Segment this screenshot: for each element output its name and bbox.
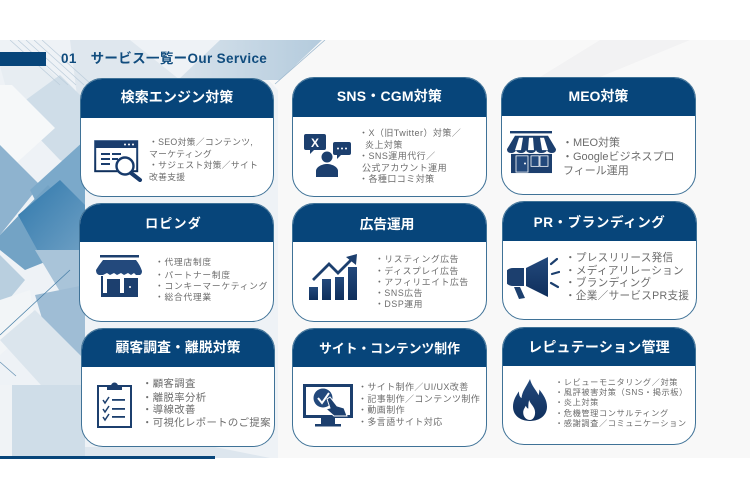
title: 01 サービス一覧ーOur Service bbox=[61, 51, 267, 66]
text: SNS・CGM対策 details: ・各種口コミ対策 bbox=[359, 174, 435, 184]
text: 検索エンジン対策 details bbox=[149, 137, 258, 182]
text: サイト details: ・記事制作／コンテンツ制作 bbox=[358, 394, 480, 404]
heading: レピュテーション管理 bbox=[503, 328, 695, 366]
heading: SNS・CGM対策: SNS・CGM対策 bbox=[337, 88, 442, 104]
panel: MEO対策 bbox=[501, 77, 696, 195]
panel: 広告運用 bbox=[292, 203, 487, 322]
panel: PR・ブランディング bbox=[502, 201, 697, 320]
text: 顧客調査 details: ・導線改善 bbox=[142, 405, 196, 416]
text: 検索エンジン対策 details: ・SEO対策／コンテンツ, bbox=[149, 137, 253, 147]
heading: 検索エンジン対策: 検索エンジン対策 bbox=[121, 89, 233, 105]
text: PR・ブランディング details: ・ブランディング bbox=[565, 277, 651, 289]
text: ロビンダ details: ・コンキーマーケティング bbox=[155, 281, 268, 291]
heading: サイト・コンテンツ制作: サイト・コンテンツ制作 bbox=[319, 341, 460, 356]
text: MEO対策 details: ・Googleビジネスプロ bbox=[562, 151, 674, 163]
text: SNS・CGM対策 details bbox=[359, 128, 461, 184]
text: SNS・CGM対策 details: ・X（旧Twitter）対策／ bbox=[359, 128, 461, 138]
heading: ロピンダ: ロピンダ bbox=[145, 216, 202, 231]
heading: 検索エンジン対策 bbox=[81, 79, 273, 118]
text: PR・ブランディング details: ・メディアリレーション bbox=[565, 265, 684, 277]
heading: MEO対策 bbox=[502, 78, 695, 116]
header accent bar bbox=[0, 52, 46, 66]
heading: PR・ブランディング: PR・ブランディング bbox=[534, 215, 665, 230]
text: 顧客調査 details: ・顧客調査 bbox=[142, 379, 196, 390]
text: 顧客調査 details: ・離脱率分析 bbox=[142, 393, 206, 404]
text: MEO対策 details: フィール運用 bbox=[563, 165, 629, 177]
icon: shop bbox=[96, 255, 142, 297]
text: ロビンダ details: ・パートナー制度 bbox=[155, 270, 231, 280]
text: SNS・CGM対策 details: 炎上対策 bbox=[365, 140, 403, 150]
icon: chat person bbox=[304, 134, 351, 177]
icon: rising chart bbox=[309, 254, 357, 300]
text: 広告運用 details: ・ディスプレイ広告 bbox=[375, 266, 459, 276]
text: ロビンダ details bbox=[155, 257, 268, 302]
text: MEO対策 details bbox=[562, 136, 674, 177]
icon: flame bbox=[513, 379, 547, 421]
icon: clipboard checklist bbox=[97, 382, 132, 428]
panel: サイト・コンテンツ制作 bbox=[292, 328, 487, 447]
heading: レピュテーション管理: レピュテーション管理 bbox=[528, 339, 670, 355]
text: レピュテーション details: ・レビューモニタリング／対策 bbox=[555, 378, 678, 387]
panel: 検索エンジン対策 bbox=[80, 78, 274, 197]
text: 顧客調査 details bbox=[142, 378, 271, 429]
text: レピュテーション details: ・炎上対策 bbox=[555, 398, 599, 407]
heading: サイト・コンテンツ制作 bbox=[293, 329, 486, 367]
heading: 顧客調査・離脱対策: 顧客調査・離脱対策 bbox=[115, 340, 241, 355]
icon: storefront bbox=[507, 131, 556, 174]
icon: browser with magnifier bbox=[94, 140, 142, 182]
text: SNS・CGM対策 details: ・SNS運用代行／ bbox=[359, 151, 436, 161]
text: 広告運用 details: ・DSP運用 bbox=[375, 299, 423, 309]
footer bar bbox=[0, 456, 215, 459]
text: 顧客調査 details: ・可視化レポートのご提案 bbox=[142, 418, 271, 429]
text: レピュテーション details bbox=[555, 378, 688, 428]
heading: SNS・CGM対策 bbox=[293, 78, 486, 117]
panel: レピュテーション管理 bbox=[502, 327, 696, 445]
text: サイト details bbox=[358, 382, 480, 427]
heading: 広告運用: 広告運用 bbox=[360, 217, 414, 232]
text: サイト details: ・多言語サイト対応 bbox=[358, 417, 443, 427]
heading: 広告運用 bbox=[293, 204, 486, 242]
text: 検索エンジン対策 details: マーケティング bbox=[149, 149, 212, 159]
text: 広告運用 details: ・リスティング広告 bbox=[375, 254, 459, 264]
heading: MEO対策: MEO対策 bbox=[569, 88, 628, 104]
text: 広告運用 details: ・アフィリエイト広告 bbox=[375, 277, 469, 287]
text: レピュテーション details: ・風評被害対策（SNS・掲示板） bbox=[555, 388, 688, 397]
text: PR・ブランディング details: ・プレスリリース発信 bbox=[565, 252, 673, 264]
text: ロビンダ details: ・総合代理業 bbox=[155, 292, 212, 302]
heading: PR・ブランディング bbox=[503, 202, 696, 241]
heading: ロピンダ bbox=[80, 204, 273, 242]
text: PR・ブランディング details bbox=[565, 252, 689, 302]
text: SNS・CGM対策 details: 公式アカウント運用 bbox=[362, 163, 447, 173]
text: ロビンダ details: ・代理店制度 bbox=[155, 257, 212, 267]
panel: SNS・CGM対策 bbox=[292, 77, 487, 197]
text: レピュテーション details: ・危機管理コンサルティング bbox=[555, 409, 669, 418]
heading: 顧客調査・離脱対策 bbox=[82, 329, 274, 367]
text: 検索エンジン対策 details: 改善支援 bbox=[149, 172, 185, 182]
icon: chat person: X bbox=[311, 136, 319, 150]
text: PR・ブランディング details: ・企業／サービスPR支援 bbox=[565, 290, 689, 302]
text: レピュテーション details: ・感謝調査／コミュニケーション bbox=[555, 419, 687, 428]
text: 検索エンジン対策 details: ・サジェスト対策／サイト bbox=[149, 160, 258, 170]
panel: ロビンダ bbox=[79, 203, 274, 322]
text: 広告運用 details bbox=[375, 254, 469, 309]
text: 広告運用 details: ・SNS広告 bbox=[375, 288, 423, 298]
text: MEO対策 details: ・MEO対策 bbox=[562, 137, 620, 149]
text: サイト details: ・動画制作 bbox=[358, 405, 405, 415]
icon: monitor with hand bbox=[303, 384, 353, 426]
text: サイト details: ・サイト制作／UI/UX改善 bbox=[358, 382, 469, 392]
panel: 顧客調査・離脱対策 bbox=[81, 328, 275, 447]
icon: megaphone bbox=[507, 257, 560, 299]
